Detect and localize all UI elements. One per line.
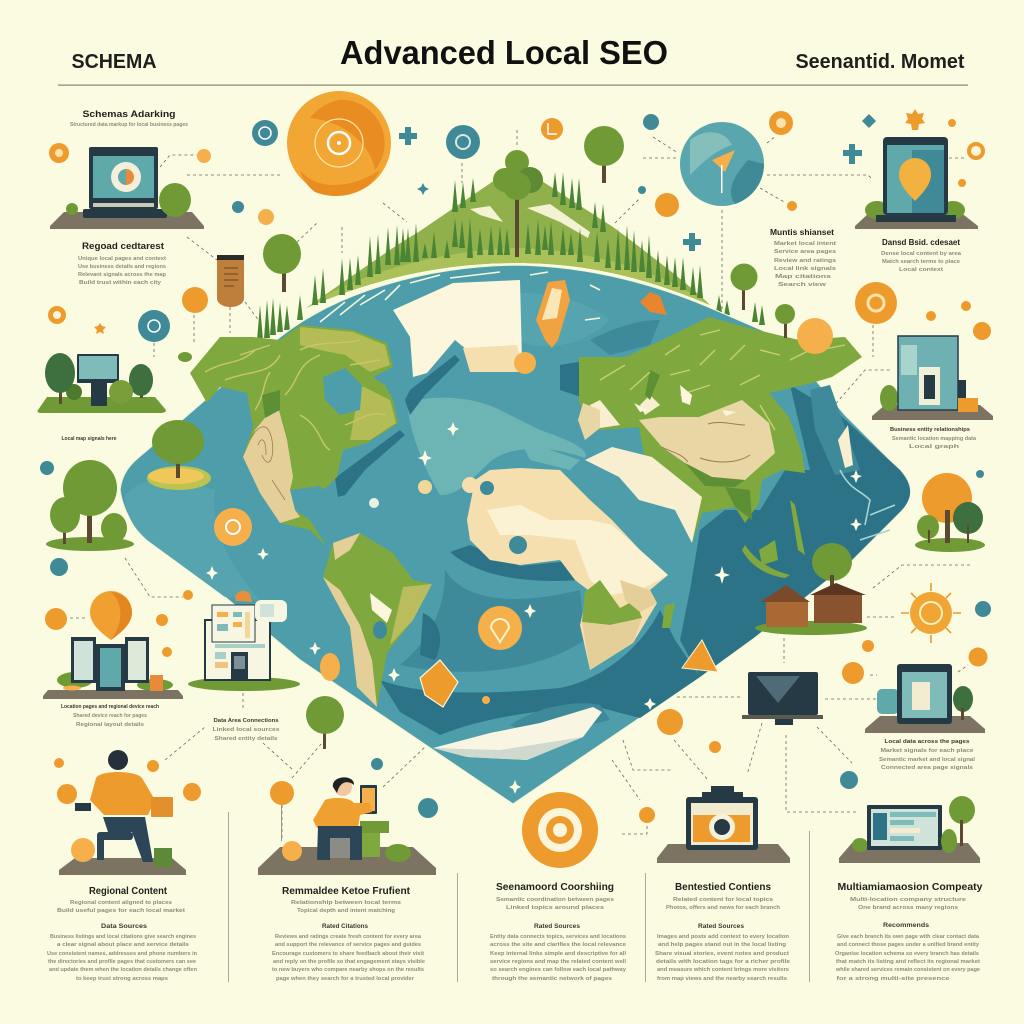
- landmass: africa: [467, 468, 668, 670]
- right header: Seenantid. Momet: [796, 51, 965, 73]
- text column: relationships: and support the relevance of service pages and guides: [275, 942, 421, 948]
- text: left caption: Local map signals here: [62, 436, 116, 442]
- text: muntis block: Service area pages: [774, 249, 836, 255]
- panel: balloon devices: [43, 591, 183, 699]
- landmass: north america: [190, 325, 398, 547]
- panel: bottom right laptop: [839, 796, 980, 863]
- text: center left caption: Linked local sources: [212, 727, 280, 733]
- text column: regional content: [47, 885, 197, 982]
- text: schema marking: Structured data markup for local business pages: [70, 122, 188, 128]
- text column: multidimensional company: and connect those pages under a unified brand entity: [837, 942, 979, 948]
- globe badge: [680, 122, 764, 206]
- tall tree on hill: [493, 150, 543, 257]
- text column: relationships: Reviews and ratings create fresh content for every area: [275, 934, 421, 940]
- text: muntis block: Local link signals: [774, 266, 836, 272]
- text column: related content: Images and posts add context to every location: [657, 934, 789, 940]
- panel: seated person right: [258, 777, 436, 875]
- panel: orange tree group: [915, 473, 985, 552]
- text: dansd block: Dense local content by area: [881, 251, 961, 257]
- text: dansd block: [881, 238, 961, 273]
- text: schema marking: [70, 109, 188, 128]
- text column: regional content: Build useful pages for each local market: [57, 908, 185, 914]
- tree: upper right: [730, 264, 758, 310]
- icon: monitor: [742, 672, 823, 725]
- map pin: gold: [478, 606, 522, 650]
- text column: multidimensional company: for a strong multi-site presence: [836, 976, 950, 982]
- small icons: left side: [40, 143, 438, 818]
- text: muntis block: Review and ratings: [774, 258, 836, 264]
- map marker: parchment: [536, 280, 570, 348]
- text: regional content: Use business details and regions: [78, 264, 166, 270]
- text column: relationships: to new buyers who compare nearby shops on the results: [272, 967, 424, 973]
- text column: related content: Share visual stories, event notes and product: [655, 951, 789, 957]
- panel: right building: [872, 336, 993, 420]
- text column: related content: Rated Sources: [698, 923, 744, 930]
- landmass: south america: [323, 533, 432, 707]
- text column: related content: [655, 881, 790, 982]
- text column: multidimensional company: while shared services remain consistent on every page: [835, 967, 980, 973]
- text column: relationships: Topical depth and intent matching: [297, 908, 395, 914]
- panel: island tree: [147, 420, 211, 490]
- terrain lake: [373, 621, 387, 639]
- text column: semantic coordinating: Seenamoord Coorshiing: [496, 881, 614, 893]
- landmass: antarctica: [433, 707, 602, 760]
- text column: multidimensional company: Organise location schema so every branch has details: [835, 951, 979, 957]
- text: balloon caption: Location pages and regional device reach: [61, 704, 160, 710]
- text column: regional content: to keep trust strong across maps: [76, 976, 168, 982]
- text column: regional content: Use consistent names, addresses and phone numbers in: [47, 951, 197, 957]
- text column: regional content: Regional content aligned to places: [70, 900, 172, 906]
- text: regional content: [78, 241, 166, 286]
- text column: regional content: Data Sources: [101, 923, 147, 930]
- text column: related content: Photos, offers and news for each branch: [666, 905, 780, 911]
- text column: multidimensional company: Recommends: [883, 922, 929, 929]
- north america terrain: [205, 340, 385, 450]
- text column: relationships: Relationship between local terms: [291, 900, 401, 906]
- text column: semantic coordinating: through the semantic network of pages: [492, 976, 612, 982]
- title: Advanced Local SEO: [340, 34, 668, 71]
- text: muntis block: Market local intent: [774, 241, 836, 247]
- text: regional content: Unique local pages and context: [78, 256, 166, 262]
- connector lines: [70, 130, 970, 840]
- text column: related content: Related content for local topics: [673, 897, 773, 903]
- text: right building caption: Semantic location mapping data: [892, 436, 976, 442]
- tree: top: [584, 126, 624, 183]
- text column: multidimensional company: Give each branch its own page with clear contact data: [837, 934, 979, 940]
- hill and forest: [257, 165, 765, 340]
- text: center left caption: [212, 718, 280, 742]
- text column: related content: from map views and the nearby search results: [657, 976, 787, 982]
- text column: related content: and help pages stand out in the local listing: [658, 942, 786, 948]
- panel: houses: [755, 543, 867, 635]
- text: muntis block: [770, 228, 836, 288]
- panel: camera: [657, 786, 790, 863]
- text: right laptop caption: Local data across the pages: [884, 739, 970, 745]
- asian islands: [662, 500, 805, 628]
- text: balloon caption: Regional layout details: [76, 722, 144, 728]
- text column: semantic coordinating: Rated Sources: [534, 923, 580, 930]
- panel: right laptop: [865, 664, 985, 733]
- text: right laptop caption: Semantic market and local signal: [879, 757, 976, 763]
- text column: related content: and measure which content brings more visitors: [657, 967, 789, 973]
- text column: semantic coordinating: Semantic coordination between pages: [496, 897, 614, 903]
- text column: semantic coordinating: Keep internal links simple and descriptive for all: [490, 951, 627, 957]
- text column: multidimensional company: Multi-location company structure: [850, 897, 966, 903]
- text: balloon caption: Shared device reach for pages: [73, 713, 147, 719]
- ocean shading: [125, 293, 910, 735]
- text: right laptop caption: Connected area page signals: [881, 765, 973, 771]
- text: dansd block: Dansd Bsid. cdesaet: [882, 238, 960, 247]
- small icons: right side: [639, 109, 991, 823]
- icon: orange label tag: [217, 255, 244, 307]
- map markers: small: [206, 352, 895, 794]
- icon: sun: [901, 583, 961, 643]
- map marker: orange blob: [320, 653, 340, 681]
- panel: left monitor garden: [38, 353, 166, 413]
- world map: [120, 265, 910, 804]
- panel: seated person left: [59, 750, 186, 875]
- left header: SCHEMA: [72, 51, 156, 73]
- text column: regional content: Regional Content: [89, 885, 167, 897]
- text: center left caption: Data Area Connections: [214, 718, 278, 724]
- text column: semantic coordinating: Entity data connects topics, services and locations: [490, 934, 626, 940]
- text: balloon caption: [61, 704, 160, 728]
- text column: regional content: the directories and profile pages that customers can see: [48, 959, 196, 965]
- column dividers: [228, 812, 810, 982]
- text column: multidimensional company: One brand across many regions: [858, 905, 958, 911]
- text column: related content: details with location tags for a richer profile: [656, 959, 790, 965]
- text column: related content: Bentestied Contiens: [675, 881, 771, 893]
- text column: relationships: Rated Citations: [322, 923, 368, 930]
- text: right laptop caption: [879, 739, 976, 771]
- map marker: orange heart: [640, 292, 667, 315]
- text column: semantic coordinating: Linked topics around places: [506, 905, 604, 911]
- text: regional content: Regoad cedtarest: [82, 241, 164, 251]
- text: dansd block: Match search terms to place: [882, 259, 960, 265]
- text: dansd block: Local context: [899, 267, 943, 273]
- text: muntis block: Search view: [778, 282, 826, 288]
- text column: relationships: Encourage customers to share feedback about their visit: [272, 951, 424, 957]
- text column: relationships: [272, 885, 425, 982]
- text column: regional content: Business listings and local citations give search engines: [50, 934, 196, 940]
- text: regional content: Relevant signals across the map: [78, 272, 166, 278]
- tree: bottom: [306, 696, 344, 749]
- text: muntis block: Muntis shianset: [770, 228, 834, 237]
- text column: multidimensional company: that match its listing and reflect its regional market: [836, 959, 980, 965]
- text: right laptop caption: Market signals for each place: [880, 748, 974, 754]
- landmass: greenland and arctic: [393, 280, 522, 377]
- panel: top right tablet: [855, 137, 978, 229]
- text column: multidimensional company: Multiamiamaosion Compeaty: [838, 881, 983, 893]
- panel: left tree group: [46, 460, 134, 551]
- eurasia terrain: [600, 330, 845, 430]
- text: right building caption: Local graph: [909, 444, 959, 450]
- text: right building caption: [890, 427, 976, 450]
- text: right building caption: Business entity relationships: [890, 427, 970, 433]
- tree: small right: [775, 304, 795, 338]
- map badge: left orange: [214, 508, 252, 546]
- text: muntis block: Map citations: [775, 274, 831, 280]
- map marker: orange right: [682, 640, 718, 672]
- panel: building: [188, 591, 300, 691]
- tree: upper left: [263, 234, 301, 292]
- text column: regional content: a clear signal about place and service details: [57, 942, 189, 948]
- text column: semantic coordinating: across the site and clarifies the local relevance: [490, 942, 626, 948]
- bush near map: [178, 352, 192, 362]
- text column: semantic coordinating: [490, 881, 627, 982]
- small icons: top row: [232, 111, 862, 251]
- text column: regional content: and update them when the location details change often: [49, 967, 197, 973]
- text: center left caption: Shared entity details: [214, 736, 278, 742]
- text: schema marking: Schemas Adarking: [82, 109, 176, 120]
- ocean base: [120, 265, 910, 804]
- text column: relationships: Remmaldee Ketoe Frufient: [282, 885, 410, 897]
- text column: multidimensional company: [835, 881, 983, 982]
- icon: orange target: [522, 792, 598, 868]
- landmass: eurasia: [579, 317, 862, 543]
- text column: semantic coordinating: so search engines can follow each local pathway: [490, 967, 626, 973]
- text column: relationships: and reply on the profile so that engagement stays visible: [273, 959, 425, 965]
- text: regional content: Build trust within each city: [79, 280, 161, 286]
- panel: top left laptop: [50, 147, 204, 229]
- circle: big orange target: [287, 91, 391, 196]
- map marker: orange star: [420, 660, 458, 707]
- text column: relationships: page when they search for a trusted local provider: [276, 976, 414, 982]
- text column: semantic coordinating: service regions and map the related content well: [490, 959, 627, 965]
